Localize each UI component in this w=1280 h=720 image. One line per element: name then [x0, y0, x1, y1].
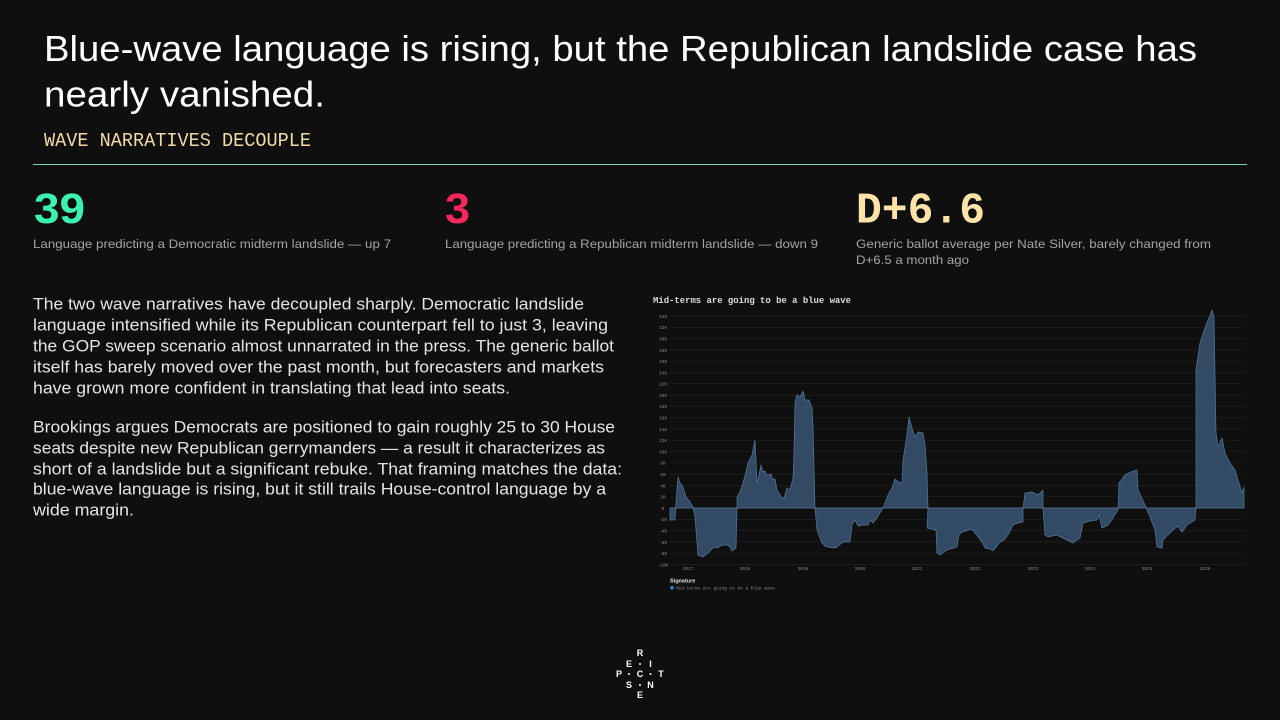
body paragraph 2: short of a landslide but a significant rebuke. That framing matches the data:	[33, 460, 622, 478]
x axis labels: 2018	[740, 567, 751, 572]
y axis labels: 40	[660, 484, 666, 489]
y axis labels: 80	[660, 462, 666, 467]
y axis labels: 260	[659, 360, 667, 365]
x axis labels: 2022	[970, 567, 981, 572]
body paragraph 2: blue-wave language is rising, but it still trails House-control language by a	[33, 480, 607, 498]
body paragraph 2: seats despite new Republican gerrymanders — a result it characterizes as	[33, 438, 605, 458]
logo: precisent cross mark: P	[616, 669, 622, 679]
y axis labels: 200	[659, 394, 667, 399]
y axis labels: 240	[659, 371, 667, 376]
stat: 3 republican landslide language: 3	[445, 185, 470, 233]
stat: 39 democratic landslide language: Language predicting a Democratic midterm landslide — up 7	[33, 237, 391, 251]
stat: 39 democratic landslide language: 39	[34, 185, 85, 233]
chart legend	[670, 578, 775, 592]
x axis labels	[683, 567, 1211, 572]
title: nearly vanished.	[44, 74, 325, 114]
chart title: Mid-terms are going to be a blue wave	[653, 296, 851, 306]
y axis labels: 60	[660, 473, 666, 478]
y axis labels: -100	[658, 563, 669, 568]
y axis labels: -20	[659, 518, 667, 523]
y axis labels	[658, 315, 669, 568]
x axis labels: 2021	[912, 567, 923, 572]
x axis labels: 2019	[798, 567, 809, 572]
x axis labels: 2026	[1200, 567, 1211, 572]
y axis labels: -80	[659, 552, 667, 557]
y axis labels: 0	[662, 507, 665, 512]
body paragraph 1: language intensified while its Republican counterpart fell to just 3, leaving	[33, 316, 608, 334]
logo: precisent cross mark: R	[637, 648, 644, 658]
x axis labels: 2024	[1085, 567, 1096, 572]
logo: precisent cross mark: E	[637, 690, 643, 700]
x axis labels: 2023	[1028, 567, 1039, 572]
chart: blue wave signature	[653, 296, 1245, 592]
logo: precisent cross mark: E	[626, 659, 632, 669]
y axis labels: -60	[659, 541, 667, 546]
logo: precisent cross mark: T	[658, 669, 664, 679]
body paragraph 1: the GOP sweep scenario almost unnarrated in the press. The generic ballot	[33, 336, 614, 356]
y axis labels: 180	[659, 405, 667, 410]
y axis labels: 120	[659, 439, 667, 444]
y axis labels: 280	[659, 349, 667, 354]
x axis labels: 2020	[855, 567, 866, 572]
logo: precisent cross mark: N	[647, 680, 654, 690]
logo: precisent cross mark: I	[649, 659, 652, 669]
stat: D+6.6 generic ballot	[856, 186, 1211, 267]
stat: D+6.6 generic ballot: D+6.6	[856, 186, 985, 236]
area series	[670, 310, 1244, 557]
body paragraph 1: have grown more confident in translating that lead into seats.	[33, 378, 510, 398]
body paragraph 2: wide margin.	[32, 500, 134, 520]
title: Blue-wave language is rising, but the Republican landslide case has	[44, 28, 1197, 69]
logo: precisent cross mark: S	[626, 680, 632, 690]
body paragraph 2: Brookings argues Democrats are positioned to gain roughly 25 to 30 House	[33, 418, 615, 436]
y axis labels: -40	[659, 530, 667, 534]
body paragraph 1	[33, 294, 614, 398]
title	[44, 28, 1197, 114]
y axis labels: 100	[659, 450, 667, 455]
stat: 3 republican landslide language: Language predicting a Republican midterm landslide — down 9	[445, 237, 818, 251]
stat: 3 republican landslide language	[445, 185, 818, 251]
y axis labels: 220	[659, 383, 667, 388]
subtitle: WAVE NARRATIVES DECOUPLE	[44, 130, 311, 152]
body paragraph 1: itself has barely moved over the past month, but forecasters and markets	[33, 358, 604, 376]
y axis labels: 20	[660, 496, 666, 501]
x axis labels: 2017	[683, 567, 694, 572]
stat: 39 democratic landslide language	[33, 185, 391, 251]
y axis labels: 160	[659, 416, 667, 422]
body paragraph 1: The two wave narratives have decoupled sharply. Democratic landslide	[33, 294, 584, 314]
y axis labels: 140	[659, 428, 667, 433]
y axis labels: 340	[659, 315, 667, 320]
chart legend: Mid-terms are going to be a blue wave	[676, 586, 775, 592]
chart legend: Signature	[670, 578, 695, 584]
logo: precisent cross mark: C	[637, 669, 644, 679]
y axis labels: 300	[659, 338, 667, 342]
y axis labels: 320	[659, 326, 667, 331]
x axis labels: 2025	[1142, 567, 1153, 572]
stat: D+6.6 generic ballot: Generic ballot average per Nate Silver, barely changed from	[856, 237, 1211, 251]
logo: precisent cross mark	[616, 648, 664, 700]
body paragraph 2	[32, 418, 622, 520]
stat: D+6.6 generic ballot: D+6.5 a month ago	[856, 253, 969, 267]
